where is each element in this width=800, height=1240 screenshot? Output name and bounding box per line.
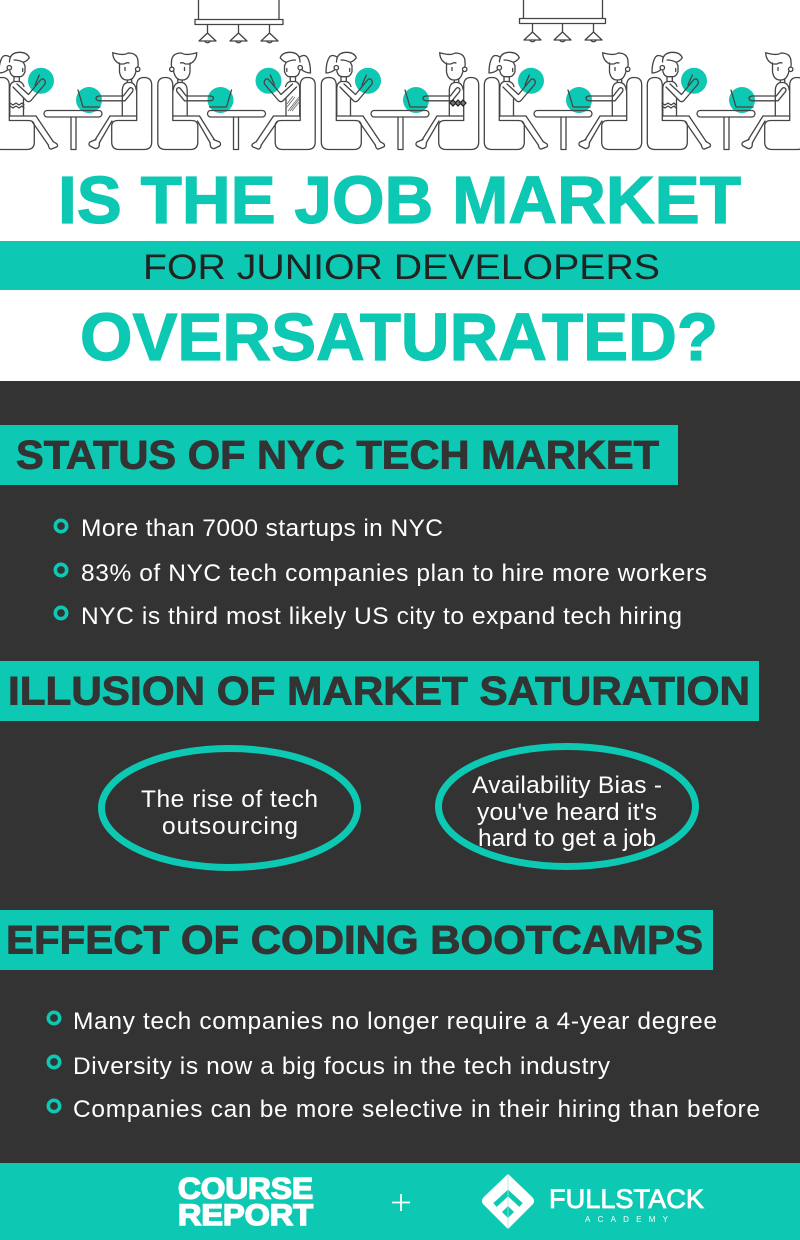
logo: Course Report: REPORT bbox=[178, 1199, 313, 1232]
sweater pattern two bbox=[287, 96, 300, 111]
subtitle band: FOR JUNIOR DEVELOPERS bbox=[143, 248, 660, 287]
callout: availability bias bbox=[438, 746, 696, 866]
list: bootcamp effects: Many tech companies no longer require a 4-year degree bbox=[73, 1008, 717, 1035]
icon: ceiling lamps left bbox=[195, 0, 283, 43]
list: bootcamp effects bbox=[48, 1008, 760, 1123]
callout: availability bias: you've heard it's bbox=[477, 799, 657, 826]
dark panel bbox=[0, 381, 800, 1163]
heading: illusion of market saturation bbox=[0, 661, 759, 721]
list: NYC market facts bbox=[55, 515, 707, 630]
shirt pattern three bbox=[450, 100, 466, 106]
figures: table five bbox=[647, 52, 800, 150]
logo: Course Report bbox=[178, 1172, 313, 1232]
callout: tech outsourcing: The rise of tech bbox=[141, 786, 318, 813]
logo: Fullstack Academy bbox=[484, 1174, 704, 1229]
heading: status of NYC tech market: STATUS OF NYC TECH MARKET bbox=[16, 434, 659, 478]
callout: tech outsourcing bbox=[102, 748, 358, 868]
heading: effect of coding bootcamps: EFFECT OF CODING BOOTCAMPS bbox=[6, 918, 703, 962]
footer band bbox=[0, 1163, 800, 1240]
sweater pattern four bbox=[662, 103, 676, 108]
logo: Fullstack Academy: ACADEMY bbox=[585, 1215, 669, 1224]
title line one: IS THE JOB MARKET bbox=[58, 163, 741, 238]
heading: effect of coding bootcamps bbox=[0, 910, 713, 970]
title line two: OVERSATURATED? bbox=[80, 300, 718, 375]
callout: tech outsourcing: outsourcing bbox=[162, 813, 298, 840]
plus sign bbox=[392, 1194, 410, 1211]
list: NYC market facts: NYC is third most likely US city to expand tech hiring bbox=[81, 603, 682, 630]
figures: table four bbox=[484, 52, 642, 150]
callout: availability bias: hard to get a job bbox=[478, 825, 656, 852]
heading: illusion of market saturation: ILLUSION OF MARKET SATURATION bbox=[8, 670, 750, 714]
figures: table two bbox=[158, 52, 315, 150]
sweater pattern one bbox=[10, 103, 24, 108]
heading: status of NYC tech market bbox=[0, 425, 678, 485]
logo: Course Report: COURSE bbox=[178, 1172, 313, 1206]
logo: Fullstack Academy: FULLSTACK bbox=[549, 1184, 704, 1214]
title bbox=[0, 163, 800, 375]
list: bootcamp effects: Companies can be more selective in their hiring than before bbox=[73, 1096, 760, 1123]
icon: ceiling lamps right bbox=[520, 0, 606, 42]
figures: table three bbox=[321, 52, 479, 150]
list: NYC market facts: More than 7000 startups in NYC bbox=[81, 515, 443, 542]
subtitle band bbox=[0, 241, 800, 290]
illustration: people at cafe tables bbox=[0, 0, 800, 150]
list: NYC market facts: 83% of NYC tech companies plan to hire more workers bbox=[81, 560, 707, 587]
list: bootcamp effects: Diversity is now a big focus in the tech industry bbox=[73, 1053, 611, 1080]
figures: table one bbox=[0, 52, 152, 150]
callout: availability bias: Availability Bias - bbox=[472, 772, 662, 799]
